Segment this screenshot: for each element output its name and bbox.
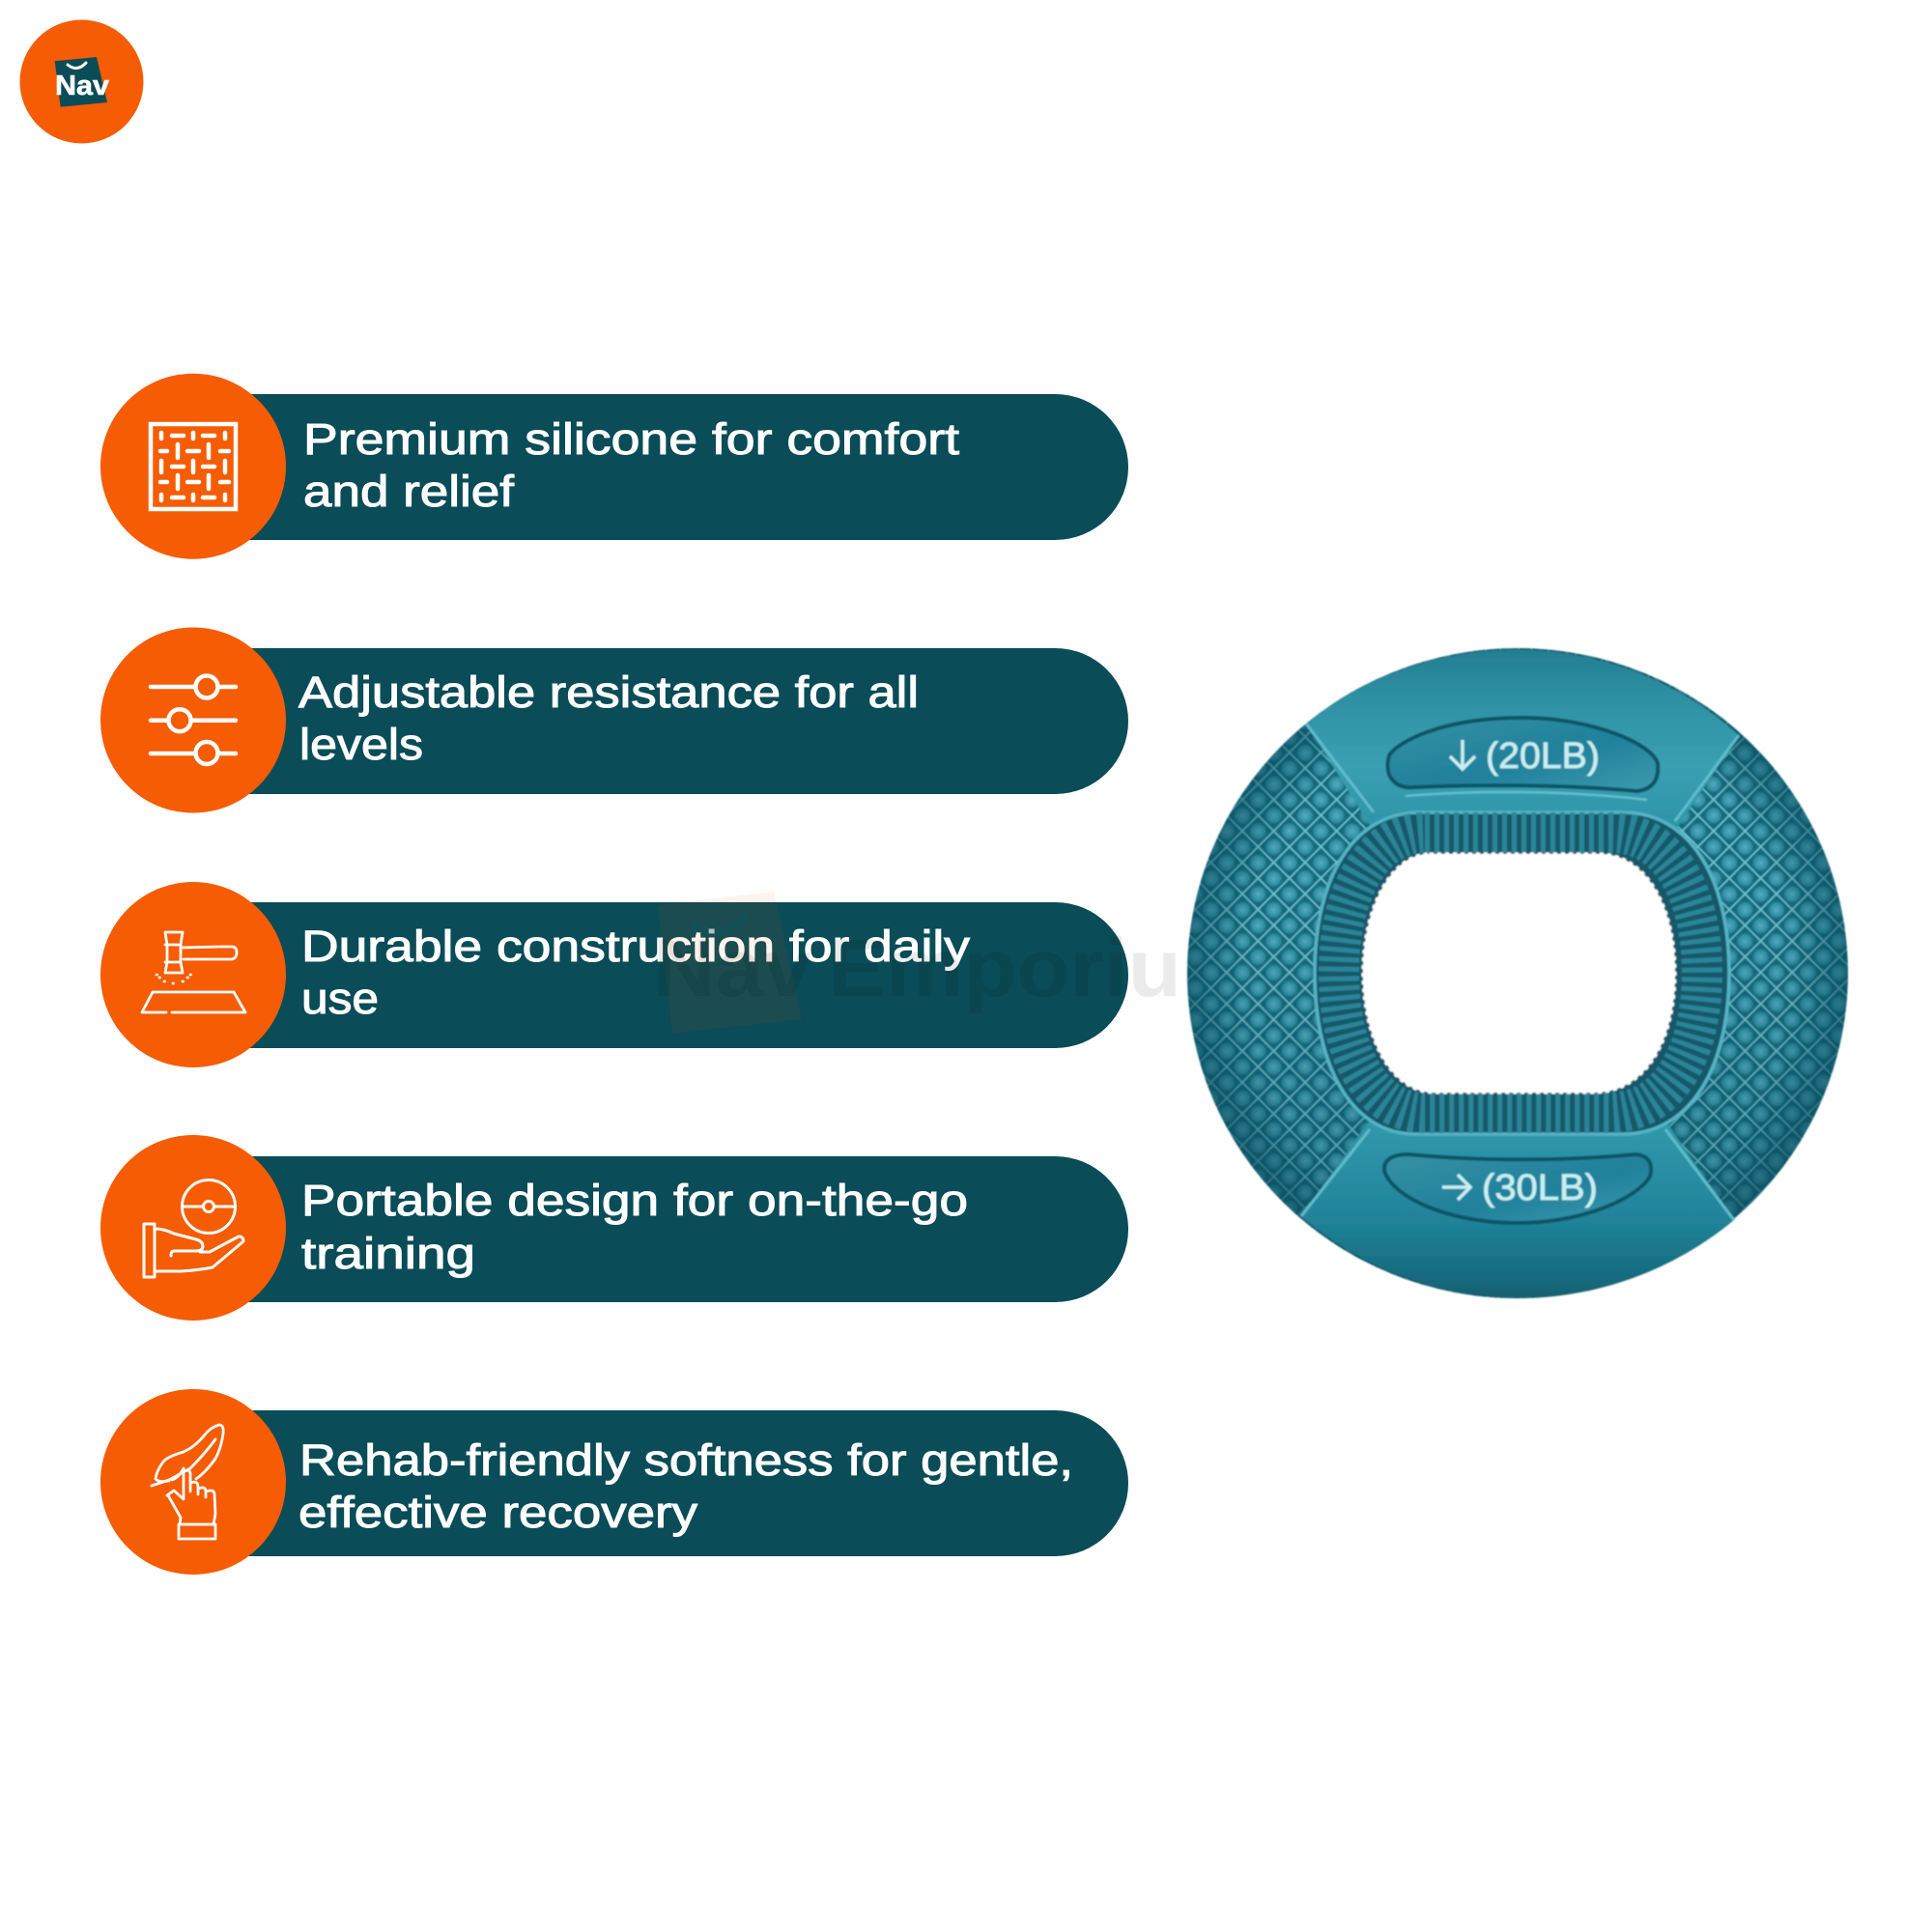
- arrow down: [1450, 740, 1475, 769]
- text 1: and relief: [303, 467, 515, 516]
- bottom label pill: (30LB): [1482, 1168, 1598, 1208]
- ribbed inner groove: [1315, 812, 1729, 1134]
- feature row 4: portable design: [100, 1135, 1128, 1321]
- icon: maze texture: [151, 424, 236, 509]
- text 2: Adjustable resistance for all: [298, 668, 919, 717]
- product: silicone grip ring: [1187, 648, 1848, 1298]
- bar 5: [116, 1410, 1128, 1556]
- text 4: [301, 1176, 968, 1278]
- centre hole: [1363, 854, 1675, 1093]
- orange circle 4: [100, 1135, 286, 1321]
- text 3: Durable construction for daily: [301, 922, 971, 971]
- top label pill: (20LB): [1486, 736, 1600, 777]
- text 5: effective recovery: [298, 1488, 698, 1537]
- text 3: [301, 922, 971, 1023]
- feature row 3: durable construction: [100, 882, 1128, 1067]
- logo badge: Nav: [55, 71, 109, 101]
- bottom label pill: [1384, 1154, 1651, 1223]
- ring body with knurled sides: [1187, 648, 1848, 1298]
- watermark: Nav Emporium: [658, 892, 1176, 1034]
- logo badge: [19, 19, 143, 143]
- orange circle 3: [100, 882, 286, 1067]
- bar 2: [116, 648, 1128, 794]
- icon: hand holding disc: [144, 1180, 243, 1277]
- feature row 1: premium silicone: [100, 374, 1128, 559]
- icon: hand with feather: [152, 1425, 223, 1539]
- feature row 5: rehab-friendly softness: [100, 1389, 1128, 1575]
- top cap: [1306, 650, 1739, 831]
- arrow right: [1442, 1175, 1470, 1200]
- feature row 2: adjustable resistance: [100, 628, 1128, 813]
- text 1: [303, 414, 960, 516]
- bar 4: [116, 1156, 1128, 1302]
- orange circle 5: [100, 1389, 286, 1575]
- text 5: [298, 1435, 1073, 1537]
- text 2: levels: [299, 720, 423, 769]
- cap separators: [1301, 724, 1739, 1220]
- watermark: Nav Emporium: Nav: [653, 923, 811, 1013]
- bar 3: [116, 902, 1128, 1048]
- orange circle 2: [100, 628, 286, 813]
- text 1: Premium silicone for comfort: [303, 414, 960, 464]
- icon: gavel: [142, 932, 245, 1012]
- text 4: training: [301, 1229, 475, 1278]
- text 4: Portable design for on-the-go: [301, 1176, 968, 1225]
- text 3: use: [301, 974, 379, 1023]
- text 5: Rehab-friendly softness for gentle,: [299, 1435, 1073, 1485]
- bar 1: [116, 394, 1128, 540]
- icon: sliders: [151, 676, 236, 764]
- orange circle 1: [100, 374, 286, 559]
- watermark: Nav Emporium: Emporium: [828, 923, 1259, 1013]
- bottom cap: [1301, 1121, 1734, 1297]
- text 2: [298, 668, 919, 769]
- top label pill: [1388, 718, 1658, 800]
